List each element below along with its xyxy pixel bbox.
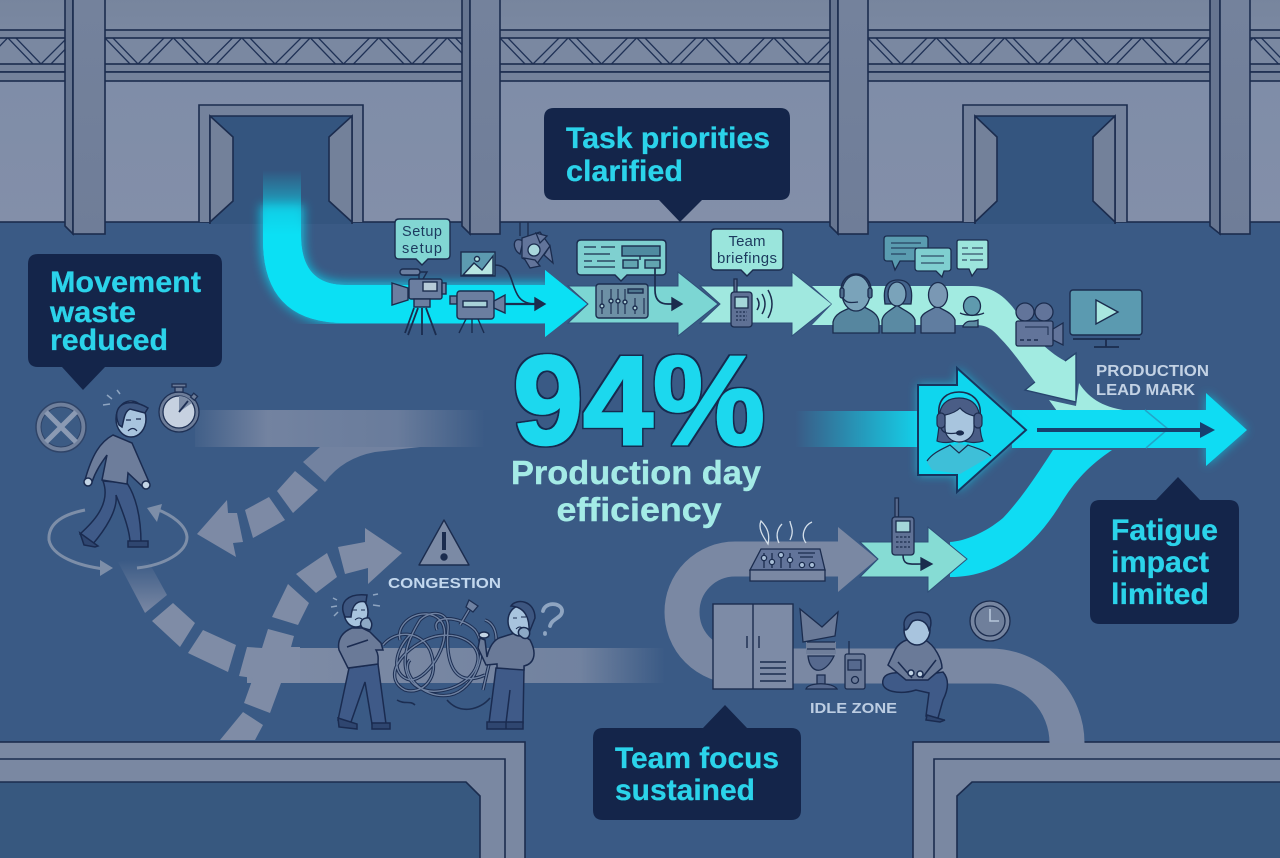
icon: broken chair [800,609,838,689]
icon: warning triangle [419,520,469,565]
person one with headset [833,274,879,333]
icon: tangled cables [383,600,496,709]
inefficient grey flow: top band and dashed return [195,410,485,557]
callout: team focus sustained: Team focus [615,742,779,775]
operator icon [927,392,991,474]
icon: team of people with speech bubbles [833,236,988,333]
callout: fatigue impact limited: limited [1111,578,1209,611]
teal chevron arrow two [568,272,718,336]
inefficient grey flow: congestion band and dashes [118,528,665,740]
person four small [960,296,984,327]
person two [882,280,915,333]
figure: stressed walking man [49,390,187,576]
icon: small radio [845,641,865,689]
icon: mixing console with loose cables [750,521,825,581]
teal chevron arrow three [700,272,832,336]
motion circle arrows [49,504,187,576]
metric label [511,454,762,528]
central fade band [795,411,930,447]
bubble: setup setup [395,219,450,265]
callout: fatigue impact limited [1090,477,1239,624]
callout: team focus sustained: sustained [615,774,755,807]
icon: question mark [543,604,562,634]
label: congestion: CONGESTION [388,575,501,592]
bubble: team briefings [711,229,783,276]
metric label: Production day [511,454,762,491]
bubble: briefing panel [577,240,666,281]
callout: fatigue impact limited: impact [1111,546,1209,579]
callout: movement waste reduced: waste [49,296,136,329]
figure: right man confused [478,602,535,729]
icon: image frame with connector [461,252,535,304]
icon: stopwatch [159,384,199,432]
icon: lower walkie talkie with arrow [892,498,932,570]
callout: team focus sustained [593,705,801,820]
callout: task priorities: Task priorities [566,122,770,155]
metric: 94%: 94% [513,330,765,471]
label: production lead mark: PRODUCTION [1096,363,1209,380]
label: production lead mark [1096,363,1209,399]
icon: mixing desk with arrow [596,268,682,318]
floor structure bottom right [913,742,1280,858]
grey U-shaped idle flow [682,527,1067,743]
speech bubbles [884,236,928,270]
icon: walkie talkie with waves [731,279,772,327]
icon: small camera with arrow [450,291,545,333]
callout: task priorities: clarified [566,155,683,188]
label: production lead mark: LEAD MARK [1096,382,1195,399]
metric label: efficiency [556,491,722,528]
icon: film projector camera [1016,303,1063,346]
door right [963,105,1127,224]
bubble: setup setup: Setup [402,224,442,240]
icon: tripod camera [392,269,446,335]
figure: sitting man [883,612,948,722]
callout: movement waste reduced: reduced [50,324,168,357]
icon: no-entry sign [36,402,86,452]
label: idle zone: IDLE ZONE [810,700,897,717]
teal curved arrow four [812,286,1130,411]
door left [199,105,363,224]
main cyan arrow [1012,393,1247,466]
bubble: team briefings: briefings [717,250,777,267]
icon: stage spotlight [514,222,553,268]
callout: movement waste reduced [28,254,222,390]
warehouse wall with truss and doors [0,0,1280,234]
top cyan glowing arrow [263,170,587,337]
bubble: setup setup: setup [402,241,442,257]
bubble: team briefings: Team [728,233,766,250]
icon: monitor with play [1070,290,1142,347]
figure: left man confused [331,594,390,729]
icon: wall clock [970,601,1010,641]
callout: fatigue impact limited: Fatigue [1111,514,1218,547]
lower teal arrow [860,527,967,592]
callout: task priorities [544,108,790,222]
callout: movement waste reduced: Movement [50,266,201,299]
lower cyan curve into main arrow [950,450,1112,577]
person three [921,282,955,333]
wall columns [65,0,1250,234]
floor structure bottom left [0,742,525,858]
agent arrow with headset operator [918,368,1026,492]
icon: cabinet [713,604,793,689]
